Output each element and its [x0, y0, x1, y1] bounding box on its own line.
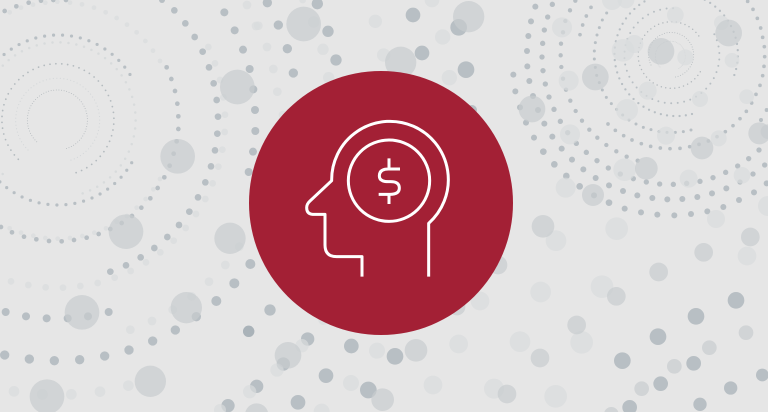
circles: lower right quadrant dark	[614, 204, 768, 412]
dots: lower left quadrant dark	[0, 205, 255, 365]
icon: dollar sign	[379, 158, 400, 204]
faint circles: bottom centre	[214, 292, 504, 412]
dotted spiral rings: upper left	[0, 35, 136, 205]
dots: top centre dark	[263, 0, 477, 117]
large circles: top centre	[286, 1, 484, 78]
large circles: upper right quadrant	[519, 20, 768, 206]
circles: lower right quadrant medium	[531, 215, 760, 412]
dots: upper left quadrant dark	[2, 0, 259, 201]
icon: coin ring	[348, 140, 430, 221]
dots: lower left quadrant faint	[7, 205, 244, 400]
icon: head with dollar coin	[307, 121, 448, 277]
faint circles: upper right quadrant	[552, 0, 768, 216]
dotted spiral rings: upper right	[614, 0, 738, 116]
red central disc	[249, 71, 513, 335]
large circles: lower left quadrant	[30, 214, 246, 412]
dots: upper right quadrant dark	[510, 0, 768, 206]
large circles: bottom centre	[245, 256, 516, 412]
large circles: upper left quadrant	[160, 70, 255, 174]
dots: bottom centre	[221, 304, 403, 412]
dots: upper left quadrant faint	[7, 0, 260, 202]
circles: lower right quadrant faint	[510, 210, 756, 408]
dots: top centre faint	[254, 0, 457, 119]
icon: head outline	[307, 121, 448, 277]
